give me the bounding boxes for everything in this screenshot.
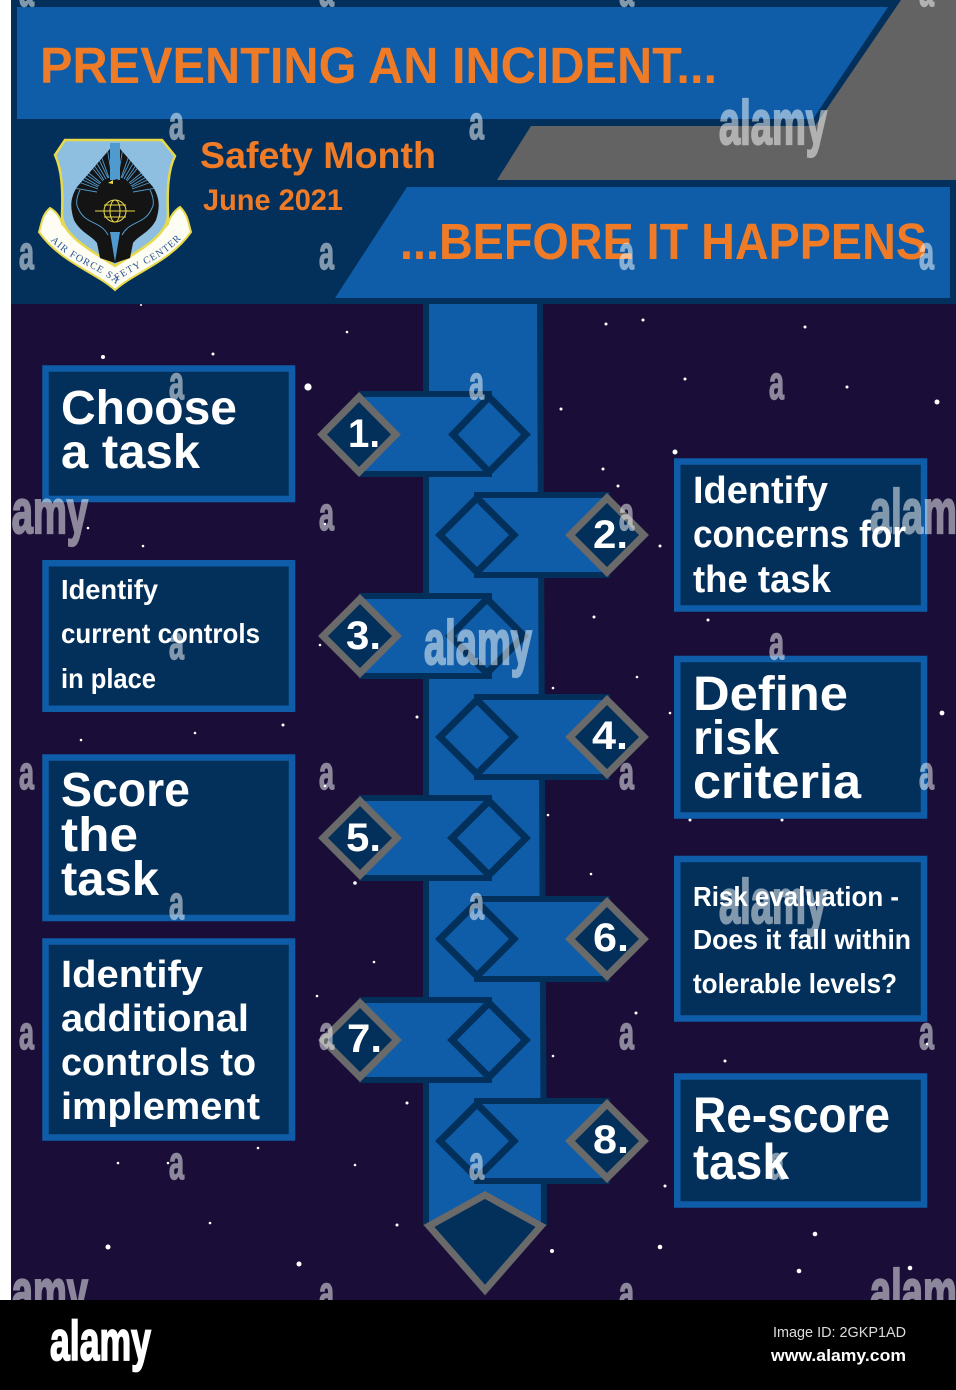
- panel: identify current controls: [46, 563, 292, 709]
- stock photo watermark: a: [319, 1006, 334, 1059]
- image id: Image ID: 2GKP1AD: [773, 1324, 906, 1341]
- panel: identify current controls: in place: [61, 663, 156, 694]
- step 2 connector: 2.: [593, 513, 628, 557]
- footer bar: [0, 1300, 956, 1390]
- stock photo watermark: a: [469, 1136, 484, 1189]
- subtitle: safety month: Safety Month: [200, 135, 436, 176]
- panel: re-score task: task: [693, 1134, 789, 1190]
- stock photo watermark: a: [169, 356, 184, 409]
- panel: choose a task: Choose: [61, 382, 237, 435]
- step 2 connector: [440, 495, 644, 575]
- stock photo watermark: a: [319, 487, 334, 540]
- panel: identify additional controls: Identify: [61, 954, 203, 996]
- stock photo watermark: alamy: [424, 609, 532, 678]
- top banner: [17, 7, 888, 119]
- panel: identify current controls: current controls: [61, 618, 260, 649]
- panel: define risk criteria: criteria: [693, 756, 861, 809]
- stock photo watermark: a: [169, 96, 184, 149]
- step 1 connector: 1.: [348, 412, 380, 456]
- step 3 connector: 3.: [346, 614, 381, 658]
- step 1 connector: [322, 394, 526, 474]
- panel: choose a task: [46, 368, 292, 499]
- stock photo watermark: a: [769, 356, 784, 409]
- stock photo watermark: a: [319, 1266, 334, 1319]
- step 3 connector: [323, 596, 524, 676]
- stock photo watermark: a: [319, 226, 334, 279]
- panel: risk evaluation: tolerable levels?: [693, 968, 897, 999]
- stars: [80, 304, 944, 1273]
- stock photo watermark: a: [19, 1006, 34, 1059]
- panel: choose a task: a task: [61, 426, 200, 479]
- step 8 connector: 8.: [593, 1118, 629, 1162]
- step 8 connector: [440, 1101, 644, 1181]
- stock photo watermark: a: [469, 356, 484, 409]
- panel: identify additional controls: [46, 942, 292, 1138]
- panel: re-score task: Re-score: [693, 1087, 890, 1143]
- lower banner: [335, 187, 950, 298]
- panel: define risk criteria: Define: [693, 668, 848, 721]
- spine arrowhead: [429, 1195, 541, 1290]
- step 4 connector: 4.: [592, 714, 628, 758]
- step 7 connector: 7.: [347, 1017, 382, 1061]
- panel: identify additional controls: implement: [61, 1086, 260, 1128]
- stock photo watermark: a: [619, 226, 634, 279]
- step 6 connector: 6.: [593, 916, 629, 960]
- panel: score the task: the: [61, 809, 138, 862]
- panel: re-score task: [677, 1076, 924, 1204]
- stock photo watermark: alamy: [719, 89, 827, 158]
- stock photo watermark: a: [19, 226, 34, 279]
- panel: score the task: [46, 758, 292, 918]
- panel: score the task: task: [61, 853, 159, 906]
- panel: identify concerns: Identify: [693, 470, 828, 512]
- panel: identify current controls: Identify: [61, 574, 158, 605]
- panel: define risk criteria: risk: [693, 712, 779, 765]
- panel: risk evaluation: [677, 859, 924, 1018]
- panel: identify concerns: the task: [693, 559, 832, 601]
- stock photo watermark: a: [319, 746, 334, 799]
- panel: risk evaluation: Does it fall within: [693, 924, 911, 955]
- website: www.alamy.com: [770, 1346, 906, 1365]
- panel: identify additional controls: controls to: [61, 1042, 256, 1084]
- stock photo watermark: a: [619, 1006, 634, 1059]
- stock photo watermark: a: [19, 746, 34, 799]
- step 7 connector: [323, 1000, 526, 1080]
- panel: risk evaluation: Risk evaluation -: [693, 881, 899, 912]
- stock photo watermark: alamy: [719, 868, 827, 937]
- stock photo watermark: a: [169, 616, 184, 669]
- icon: air force safety center crest: AIR FORCE SAFETY CENTER: [50, 236, 182, 284]
- stock photo watermark: a: [919, 746, 934, 799]
- panel: identify concerns: [677, 462, 924, 608]
- white left margin: [0, 0, 11, 1300]
- stock photo watermark: a: [619, 487, 634, 540]
- stock photo watermark: a: [919, 226, 934, 279]
- title: preventing an incident: PREVENTING AN INCIDENT...: [40, 37, 717, 94]
- stock photo watermark: a: [169, 876, 184, 929]
- central spine arrow: [423, 304, 547, 1290]
- panel: identify concerns: concerns for: [693, 514, 906, 556]
- panel: score the task: Score: [61, 764, 190, 817]
- night sky background: [11, 300, 956, 1300]
- stock photo watermark: a: [619, 746, 634, 799]
- stock photo watermark: a: [469, 876, 484, 929]
- stock photo watermark: a: [619, 1266, 634, 1319]
- subtitle: date: June 2021: [203, 184, 343, 217]
- step 5 connector: [323, 798, 526, 878]
- step 6 connector: [440, 899, 644, 979]
- step 5 connector: 5.: [346, 816, 381, 860]
- step 4 connector: [440, 697, 644, 777]
- stock photo watermark: a: [169, 1136, 184, 1189]
- footer logo: alamy: [50, 1309, 151, 1372]
- panel: define risk criteria: [677, 659, 924, 816]
- stock photo watermark: a: [919, 1006, 934, 1059]
- stock photo watermark: a: [769, 616, 784, 669]
- icon: air force safety center crest: [38, 138, 192, 292]
- stock photo watermark: a: [769, 1136, 784, 1189]
- header panel: [11, 0, 956, 304]
- stock photo watermark: a: [469, 96, 484, 149]
- panel: identify additional controls: additional: [61, 998, 249, 1040]
